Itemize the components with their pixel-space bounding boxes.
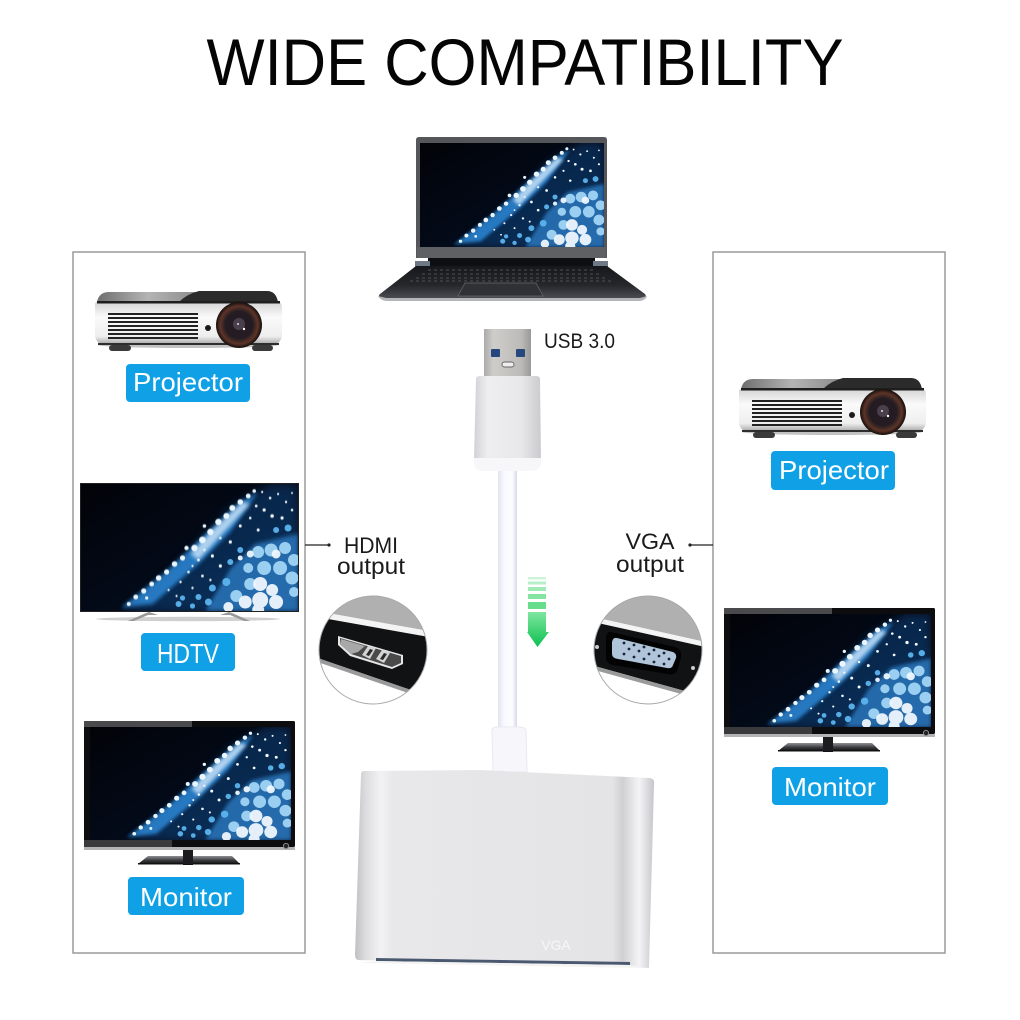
left panel: Projector label <box>126 364 250 402</box>
right panel: Projector label: Projector <box>779 455 889 485</box>
left panel: projector <box>95 291 282 351</box>
left panel: HDTV label: HDTV <box>157 638 219 669</box>
callout: VGA output <box>616 529 713 577</box>
left panel: Projector label: Projector <box>133 367 243 397</box>
title: WIDE COMPATIBILITY <box>206 25 844 99</box>
cable <box>498 465 517 735</box>
label: USB 3.0: USB 3.0 <box>544 329 615 353</box>
adapter body: VGA <box>541 937 571 953</box>
right panel: monitor <box>724 608 935 752</box>
left panel: HDTV label <box>141 633 235 671</box>
panel: left display group <box>73 252 305 953</box>
right panel: projector <box>739 378 926 438</box>
callout: HDMI output: HDMI <box>344 533 398 558</box>
adapter body <box>355 727 654 968</box>
panel: right display group <box>713 252 945 953</box>
icon: VGA port close-up <box>594 596 702 704</box>
right panel: Monitor label: Monitor <box>784 772 876 802</box>
callout: VGA output: VGA <box>626 529 675 554</box>
arrow: signal direction <box>527 577 549 647</box>
icon: HDMI port close-up <box>318 596 428 704</box>
USB plug <box>474 329 541 471</box>
left panel: HDTV <box>80 483 300 621</box>
left panel: Monitor label <box>128 877 244 915</box>
callout: HDMI output: output <box>337 553 406 579</box>
left panel: Monitor label: Monitor <box>140 882 232 912</box>
right panel: Projector label <box>771 451 895 490</box>
callout: HDMI output <box>305 533 406 579</box>
right panel: Monitor label <box>772 767 888 805</box>
icon: laptop <box>378 137 647 301</box>
callout: VGA output: output <box>616 551 685 577</box>
left panel: monitor <box>84 721 295 865</box>
